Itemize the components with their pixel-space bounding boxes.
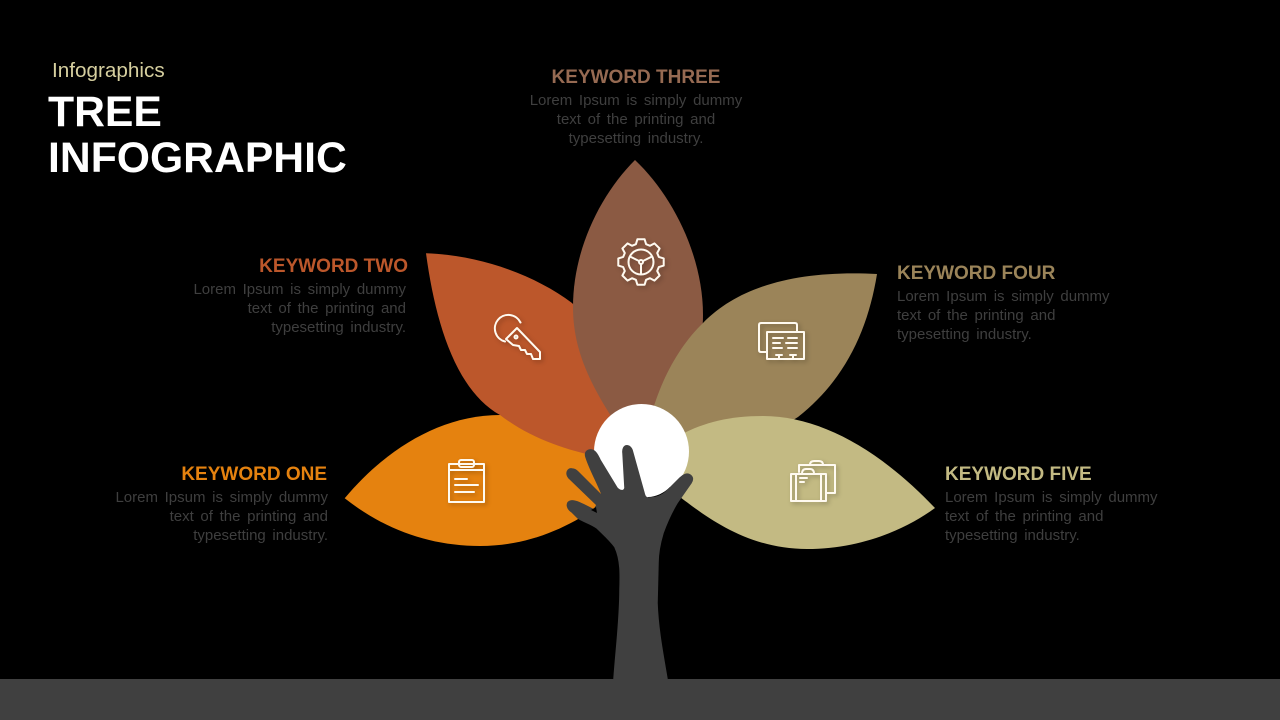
text block: keyword two: text of the printing and [248,300,406,317]
text block: keyword one: typesetting industry. [193,527,328,544]
title: INFOGRAPHIC [48,134,347,182]
hand and trunk [567,446,692,679]
text block: keyword five: text of the printing and [945,508,1103,525]
text block: keyword four: Lorem Ipsum is simply dummy [897,288,1110,305]
text block: keyword one: Lorem Ipsum is simply dummy [115,489,328,506]
circle shadow sliver [648,487,672,500]
petal two [426,253,630,457]
petal five [660,416,935,549]
text block: keyword two [193,256,408,336]
icon: gear [618,239,664,285]
text block: keyword two: typesetting industry. [271,319,406,336]
finger gap accent [591,507,597,513]
text block: keyword four: KEYWORD FOUR [897,263,1055,284]
icon: key [495,315,540,359]
ground bar [0,679,1280,720]
text block: keyword three: typesetting industry. [569,130,703,147]
text block: keyword five: typesetting industry. [945,527,1080,544]
subtitle: Infographics [52,59,165,82]
center circle [594,404,689,499]
icon: cards [759,323,804,359]
text block: keyword one: KEYWORD ONE [181,464,327,485]
icon: clipboard [449,460,484,502]
text block: keyword four: text of the printing and [897,307,1055,324]
text block: keyword three: KEYWORD THREE [552,67,720,88]
petal three [573,160,703,440]
title [48,88,347,182]
text block: keyword two: Lorem Ipsum is simply dummy [193,281,406,298]
text block: keyword five: KEYWORD FIVE [945,464,1092,485]
text block: keyword one: text of the printing and [170,508,328,525]
text block: keyword four: typesetting industry. [897,326,1032,343]
text block: keyword three [530,67,742,147]
text block: keyword five: Lorem Ipsum is simply dummy [945,489,1158,506]
text block: keyword five [945,464,1158,544]
text block: keyword four [897,263,1110,343]
petal one [345,415,640,546]
title: TREE [48,88,162,136]
text block: keyword three: text of the printing and [557,111,715,128]
text block: keyword one [115,464,328,544]
icon: suitcases [791,461,835,501]
text block: keyword two: KEYWORD TWO [259,256,408,277]
petal four [640,273,877,450]
text block: keyword three: Lorem Ipsum is simply dummy [530,92,742,109]
